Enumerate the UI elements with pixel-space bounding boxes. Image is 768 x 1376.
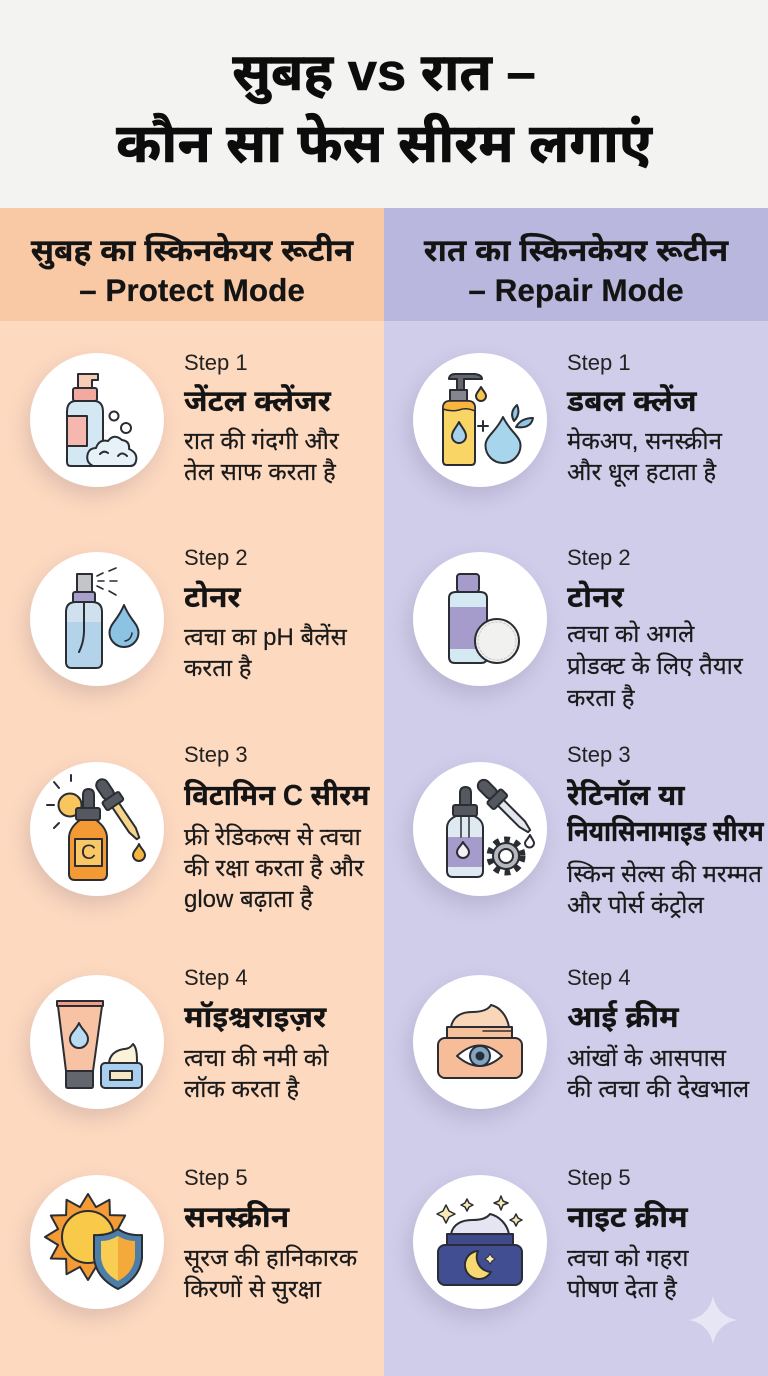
step title	[566, 778, 764, 848]
icon: sunscreen	[30, 1175, 164, 1309]
step label: Step 3	[567, 742, 631, 767]
step description	[566, 427, 722, 487]
step label: Step 1	[184, 350, 248, 375]
step label: Step 1	[567, 350, 631, 375]
night step 5	[405, 1165, 689, 1322]
night step 1	[405, 350, 722, 500]
step description	[184, 1244, 358, 1304]
step title: टोनर	[567, 581, 624, 614]
morning step 3	[21, 742, 370, 913]
step description	[566, 860, 762, 919]
icon: eye cream	[413, 975, 547, 1109]
panel: morning background	[0, 321, 384, 1376]
step title: आई क्रीम	[567, 1001, 679, 1034]
night step 3	[405, 742, 764, 919]
step description: रात की गंदगी और	[184, 428, 339, 455]
step description: आंखों के आसपास	[567, 1045, 726, 1072]
step description: पोषण देता है	[567, 1276, 677, 1303]
step description: और धूल हटाता है	[567, 459, 716, 486]
step title: सनस्क्रीन	[184, 1201, 289, 1234]
step description: त्वचा की नमी को	[184, 1045, 328, 1072]
step description	[566, 620, 744, 712]
night step 2	[405, 545, 744, 712]
step description: लॉक करता है	[184, 1076, 299, 1103]
morning step 1	[21, 350, 340, 502]
title banner: कौन सा फेस सीरम लगाएं	[116, 113, 652, 174]
step label: Step 2	[184, 545, 248, 570]
step description: प्रोडक्ट के लिए तैयार	[567, 653, 743, 680]
step description	[184, 427, 340, 486]
step title: नाइट क्रीम	[567, 1201, 688, 1234]
step title: मॉइश्चराइज़र	[184, 1001, 326, 1034]
step title: विटामिन C सीरम	[184, 780, 369, 812]
icon: double cleanse	[413, 353, 547, 487]
morning step 4	[21, 965, 329, 1124]
step description: करता है	[184, 655, 252, 682]
title banner	[0, 0, 768, 208]
heading: morning routine: सुबह का स्किनकेयर रूटीन	[31, 232, 353, 268]
step label: Step 4	[184, 965, 248, 990]
title banner: सुबह vs रात –	[232, 43, 536, 102]
icon: sparkle watermark	[690, 1296, 736, 1344]
step label: Step 5	[567, 1165, 631, 1190]
morning step 2	[21, 545, 348, 700]
step description: तेल साफ करता है	[184, 459, 336, 486]
step description	[566, 1044, 750, 1103]
step label: Step 3	[184, 742, 248, 767]
heading: morning routine: – Protect Mode	[79, 272, 305, 308]
step title: टोनर	[184, 581, 241, 614]
icon: toner spray	[30, 552, 164, 686]
step description: स्किन सेल्स की मरम्मत	[567, 861, 762, 888]
step description: फ्री रेडिकल्स से त्वचा	[184, 824, 361, 851]
step description: और पोर्स कंट्रोल	[567, 892, 704, 919]
step description: मेकअप, सनस्क्रीन	[567, 428, 722, 455]
step description	[184, 623, 348, 682]
heading: morning routine	[0, 208, 384, 321]
heading: night routine: रात का स्किनकेयर रूटीन	[424, 232, 728, 268]
icon: vitamin C serum	[30, 762, 164, 896]
icon: moisturizer	[30, 975, 164, 1109]
step label: Step 4	[567, 965, 631, 990]
heading: night routine: – Repair Mode	[468, 272, 684, 308]
morning step 5	[21, 1165, 358, 1324]
icon: foam cleanser	[30, 353, 164, 487]
step description	[184, 823, 364, 913]
step title: डबल क्लेंज	[567, 385, 697, 418]
step description: की रक्षा करता है और	[184, 855, 364, 882]
icon: vitamin C serum: C	[81, 841, 96, 864]
step description: glow बढ़ाता है	[184, 886, 313, 913]
step description: किरणों से सुरक्षा	[184, 1276, 321, 1303]
step description: त्वचा को गहरा	[567, 1245, 688, 1272]
step description: सूरज की हानिकारक	[184, 1245, 357, 1272]
step description: करता है	[567, 685, 635, 712]
step title: नियासिनामाइड सीरम	[567, 816, 764, 848]
icon: night cream	[413, 1175, 547, 1309]
heading: night routine	[384, 208, 768, 321]
night step 4	[405, 965, 750, 1122]
step title: जेंटल क्लेंजर	[184, 385, 331, 418]
panel: night background	[384, 321, 768, 1376]
icon: retinol serum with gear	[413, 762, 547, 896]
step description: की त्वचा की देखभाल	[567, 1076, 749, 1103]
step description	[184, 1044, 329, 1103]
step description: त्वचा को अगले	[567, 621, 694, 648]
icon: toner with cotton pad	[413, 552, 547, 686]
step description	[566, 1244, 689, 1303]
step label: Step 5	[184, 1165, 248, 1190]
step title: रेटिनॉल या	[567, 780, 685, 812]
step label: Step 2	[567, 545, 631, 570]
step description: त्वचा का pH बैलेंस	[184, 624, 347, 651]
